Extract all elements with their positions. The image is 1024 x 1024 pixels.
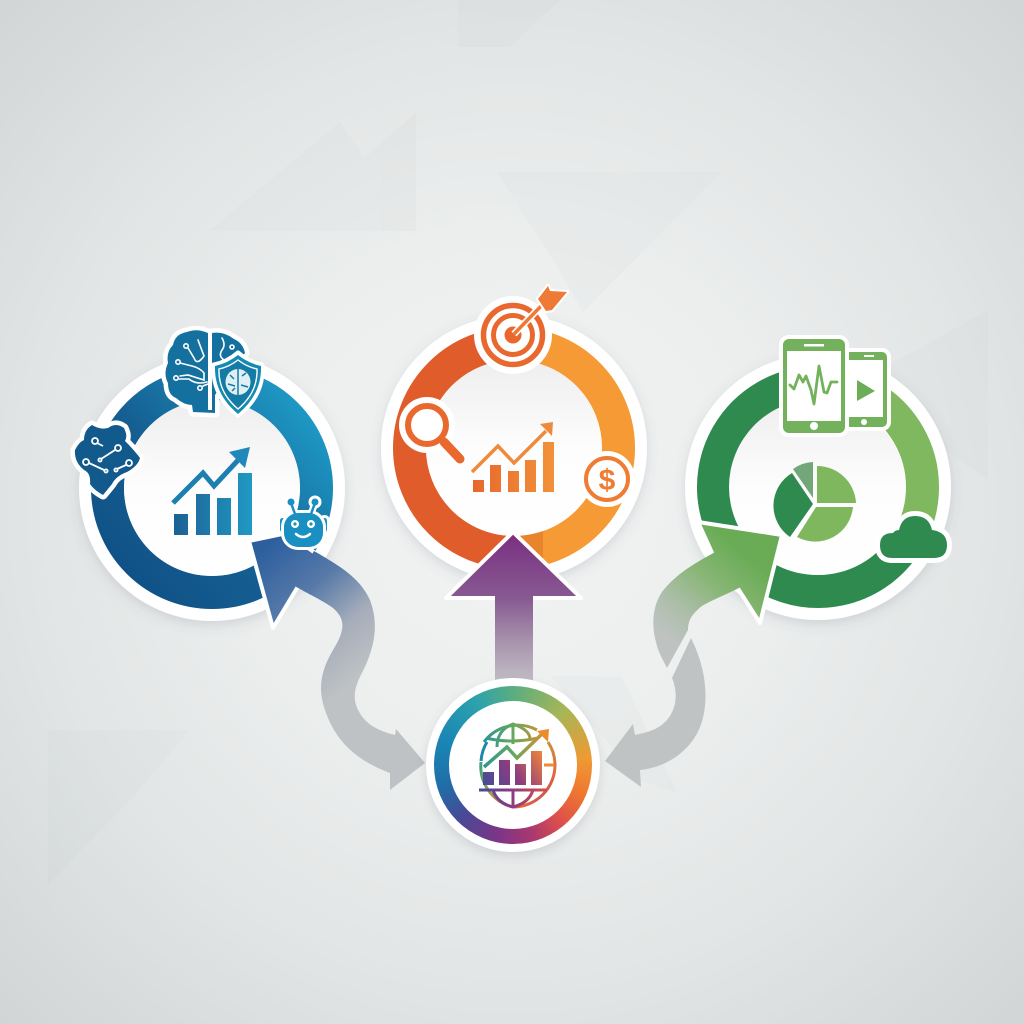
panel: central hub badge (426, 678, 600, 852)
ring: orange (381, 315, 647, 581)
icon: magnifier (399, 397, 460, 459)
icon: target with dart (474, 286, 567, 374)
icon: dollar coin (579, 451, 635, 507)
arrow: purple (446, 532, 581, 686)
icon: cloud (880, 516, 947, 558)
icon: circuit brain (166, 330, 245, 413)
icon: robot (280, 498, 327, 547)
ring: rainbow (434, 686, 592, 844)
panel: blue cycle (75, 330, 425, 790)
arrow: green cycle to hub (605, 522, 782, 787)
background: faint arrow shapes (48, 0, 988, 885)
pie chart (773, 462, 856, 542)
icon: brain shield (214, 353, 262, 415)
panel: orange cycle (381, 286, 647, 686)
ring: blue (79, 355, 345, 621)
icon: network blob (75, 425, 140, 495)
arrow: blue cycle to hub (249, 533, 425, 790)
icon: dollar coin: $ (599, 464, 616, 497)
bar chart: orange (472, 422, 554, 492)
bar chart: blue (173, 447, 252, 535)
icon: globe with growth chart (479, 722, 556, 808)
ring: green (685, 354, 951, 620)
hub inner disc (449, 701, 577, 829)
panel: green cycle (605, 339, 951, 787)
icon: phones (783, 339, 887, 433)
